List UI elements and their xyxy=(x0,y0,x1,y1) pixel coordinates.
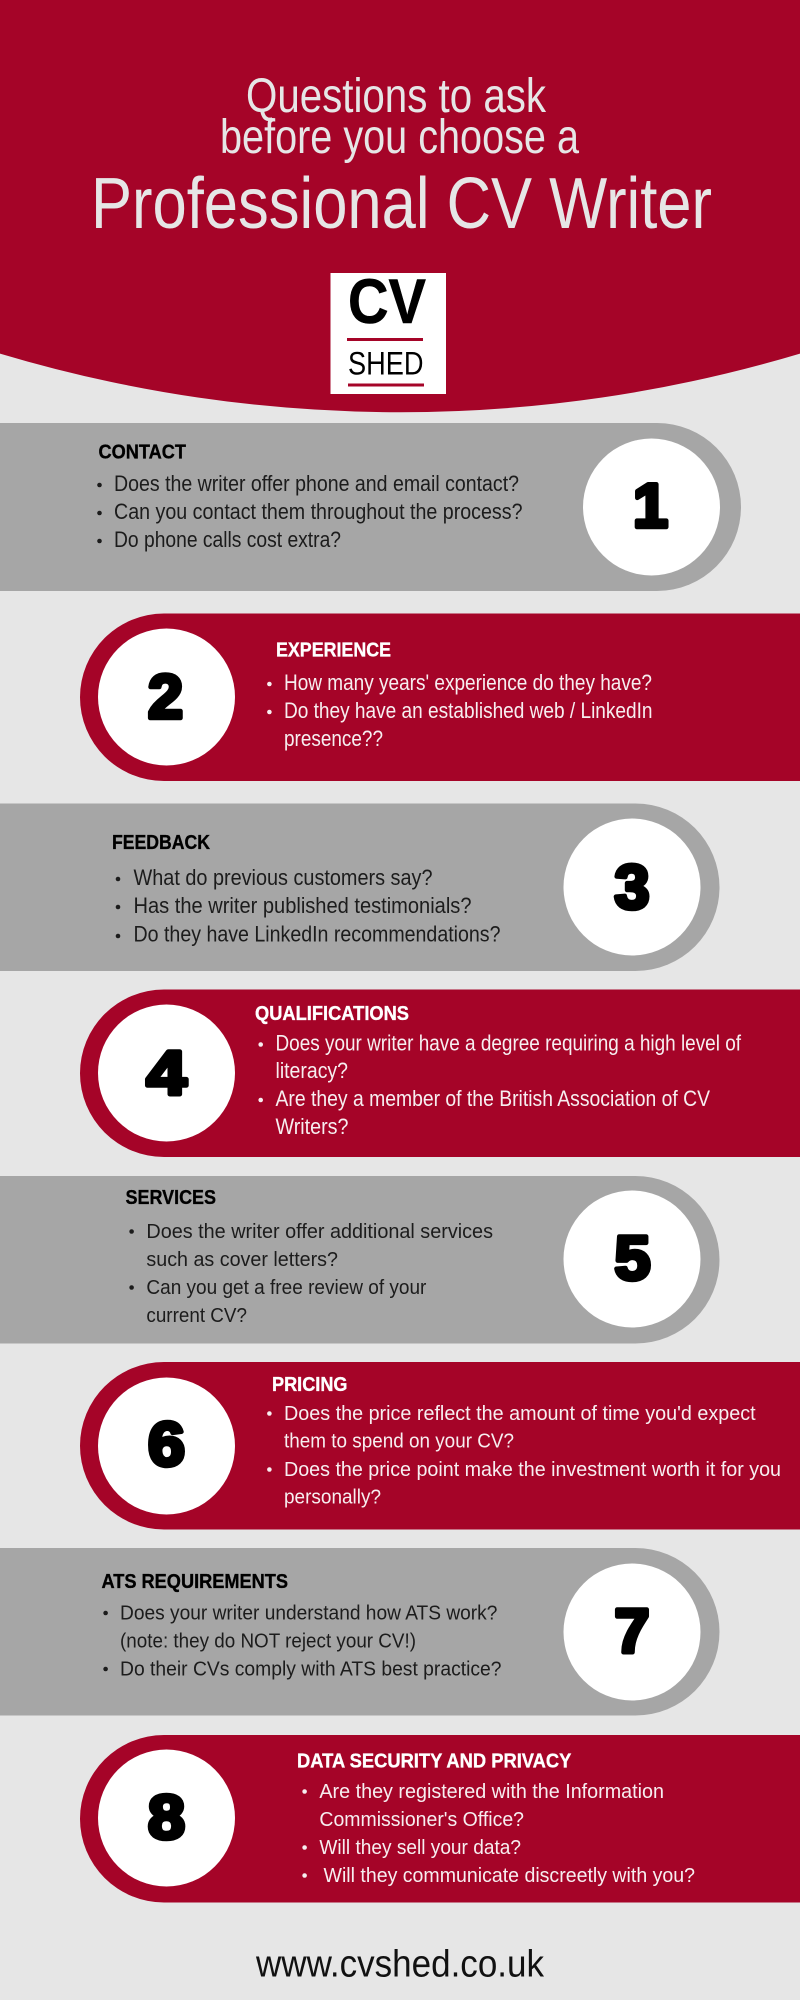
heading: pricing: PRICING xyxy=(272,1373,348,1396)
bullet list: pricing: Does the price reflect the amount of time you'd expect xyxy=(284,1402,756,1425)
heading: ATS requirements: ATS REQUIREMENTS xyxy=(102,1570,288,1593)
number circle 5 xyxy=(564,1190,700,1328)
logo: CV Shed: CV xyxy=(348,267,426,337)
bullet list: qualifications: literacy? xyxy=(276,1058,348,1083)
logo: CV Shed xyxy=(330,267,446,394)
logo: CV Shed: SHED xyxy=(348,346,424,382)
bullet list: pricing: personally? xyxy=(284,1486,381,1508)
bullet list: contact: Does the writer offer phone and email contact? xyxy=(114,471,519,496)
heading: feedback: FEEDBACK xyxy=(112,831,210,854)
bullet list: services: Can you get a free review of your xyxy=(146,1276,427,1299)
panel shape xyxy=(0,423,741,591)
header curved red background xyxy=(0,0,800,412)
number circle 1: 1 xyxy=(633,472,668,541)
panel shape xyxy=(80,1735,800,1902)
heading: services: SERVICES xyxy=(126,1186,216,1209)
bullet list: pricing: Does the price point make the investment worth it for you xyxy=(284,1458,781,1481)
number circle 3 xyxy=(564,818,700,956)
number circle 3: 3 xyxy=(614,854,650,922)
panel 5: services xyxy=(0,1176,720,1344)
number circle 7: 7 xyxy=(614,1598,650,1666)
bullet list: feedback: Do they have LinkedIn recommendations? xyxy=(134,922,500,946)
bullet list: qualifications: Writers? xyxy=(276,1114,348,1139)
bullet list: qualifications xyxy=(258,1030,742,1139)
header banner xyxy=(0,0,800,412)
bullet list: experience xyxy=(267,670,652,751)
number circle 2: 2 xyxy=(148,663,183,732)
bullet list: qualifications: Are they a member of the British Association of CV xyxy=(276,1086,710,1111)
panel shape xyxy=(0,804,720,971)
title: before you choose a xyxy=(220,111,579,164)
number circle 4 xyxy=(98,1004,235,1142)
number circle 5: 5 xyxy=(614,1224,650,1294)
bullet list: services: such as cover letters? xyxy=(146,1248,338,1271)
bullet list: services: current CV? xyxy=(146,1304,247,1327)
panel 4: qualifications xyxy=(80,990,800,1157)
heading: experience: EXPERIENCE xyxy=(276,638,391,662)
bullet list: contact: Can you contact them throughout the process? xyxy=(114,499,522,524)
bullet list: data security and privacy: Commissioner's Office? xyxy=(319,1808,524,1831)
title: Professional CV Writer xyxy=(91,164,712,244)
bullet list: feedback: What do previous customers say? xyxy=(134,865,432,890)
bullet list: ATS requirements: Does your writer understand how ATS work? xyxy=(120,1602,497,1624)
bullet list: data security and privacy xyxy=(302,1780,695,1887)
bullet list: data security and privacy: Are they registered with the Information xyxy=(319,1780,664,1803)
number circle 8: 8 xyxy=(148,1784,185,1852)
bullet list: ATS requirements xyxy=(103,1602,502,1680)
bullet list: contact xyxy=(97,471,522,552)
bullet list: experience: Do they have an established web / LinkedIn xyxy=(284,698,652,723)
heading: data security and privacy: DATA SECURITY AND PRIVACY xyxy=(297,1750,572,1772)
bullet list: services xyxy=(129,1220,493,1327)
bullet list: ATS requirements: Do their CVs comply with ATS best practice? xyxy=(120,1658,502,1680)
footer website url: www.cvshed.co.uk xyxy=(255,1944,545,1986)
panel 6: pricing xyxy=(80,1362,800,1530)
panel shape xyxy=(80,614,800,781)
number circle 2 xyxy=(98,628,235,766)
number circle 4: 4 xyxy=(146,1039,187,1108)
number circle 1 xyxy=(583,438,720,576)
panel shape xyxy=(0,1548,720,1716)
bullet list: services: Does the writer offer additional services xyxy=(146,1220,493,1243)
heading: qualifications: QUALIFICATIONS xyxy=(255,1002,409,1025)
panel 8: data security and privacy xyxy=(80,1735,800,1902)
number circle 7 xyxy=(564,1564,700,1700)
bullet list: ATS requirements: (note: they do NOT reject your CV!) xyxy=(120,1630,416,1652)
bullet list: pricing xyxy=(267,1402,781,1508)
number circle 8 xyxy=(98,1750,235,1886)
heading: contact: CONTACT xyxy=(98,440,186,464)
panel shape xyxy=(80,1362,800,1530)
number circle 6 xyxy=(98,1378,235,1514)
bullet list: data security and privacy: Will they communicate discreetly with you? xyxy=(324,1864,695,1887)
panel shape xyxy=(0,1176,720,1344)
panel 1: contact xyxy=(0,423,741,591)
title: Questions to ask xyxy=(246,70,547,123)
bullet list: contact: Do phone calls cost extra? xyxy=(114,527,341,552)
title xyxy=(91,70,712,244)
bullet list: experience: How many years' experience do they have? xyxy=(284,670,652,695)
panel 3: feedback xyxy=(0,804,720,971)
bullet list: feedback: Has the writer published testimonials? xyxy=(134,893,472,918)
bullet list: experience: presence?? xyxy=(284,726,383,751)
bullet list: data security and privacy: Will they sell your data? xyxy=(319,1836,521,1859)
panel shape xyxy=(80,990,800,1157)
bullet list: feedback xyxy=(116,865,500,946)
number circle 6: 6 xyxy=(148,1410,185,1480)
panel 7: ATS requirements xyxy=(0,1548,720,1716)
panel 2: experience xyxy=(80,614,800,781)
bullet list: pricing: them to spend on your CV? xyxy=(284,1430,514,1452)
